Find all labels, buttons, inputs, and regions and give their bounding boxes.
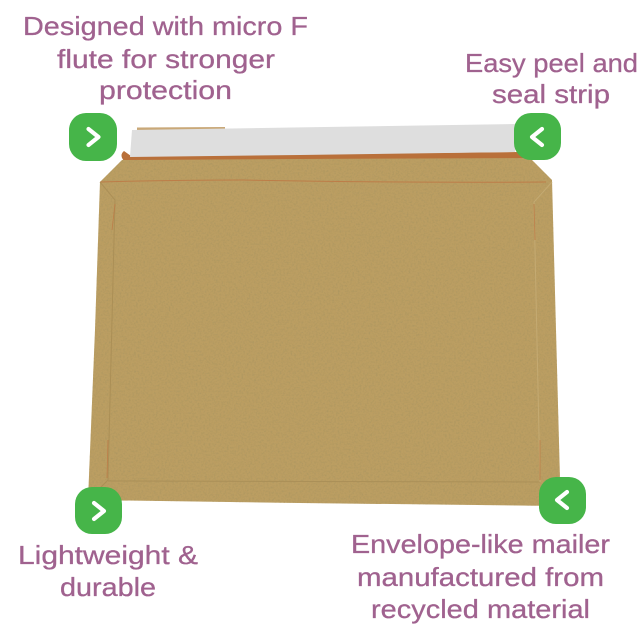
callout: lightweight bbox=[18, 487, 198, 602]
icon: right chevron button bbox=[69, 113, 117, 161]
heading: peel and seal: Easy peel and bbox=[465, 48, 638, 78]
icon: left chevron button bbox=[539, 477, 586, 524]
heading: peel and seal: seal strip bbox=[492, 79, 610, 109]
peel strip backing bbox=[122, 124, 525, 161]
heading: recycled material bbox=[351, 529, 610, 624]
heading: recycled material: manufactured from bbox=[357, 562, 604, 592]
heading: lightweight: durable bbox=[60, 572, 156, 602]
heading: micro F flute bbox=[23, 11, 308, 105]
envelope mailer bbox=[88, 124, 560, 506]
heading: micro F flute: protection bbox=[99, 75, 232, 105]
callout: micro F flute bbox=[23, 11, 308, 161]
icon: left chevron button bbox=[514, 113, 561, 160]
heading: peel and seal bbox=[465, 48, 638, 109]
callout: recycled material bbox=[351, 477, 610, 624]
heading: recycled material: recycled material bbox=[371, 594, 590, 624]
heading: lightweight bbox=[18, 540, 198, 602]
callout: peel and seal bbox=[465, 48, 638, 160]
envelope body bbox=[88, 158, 560, 506]
fold lines bbox=[100, 180, 552, 488]
heading: micro F flute: Designed with micro F bbox=[23, 11, 308, 41]
heading: lightweight: Lightweight & bbox=[18, 540, 198, 570]
heading: recycled material: Envelope-like mailer bbox=[351, 529, 610, 559]
icon: right chevron button bbox=[75, 487, 122, 534]
heading: micro F flute: flute for stronger bbox=[57, 44, 275, 74]
